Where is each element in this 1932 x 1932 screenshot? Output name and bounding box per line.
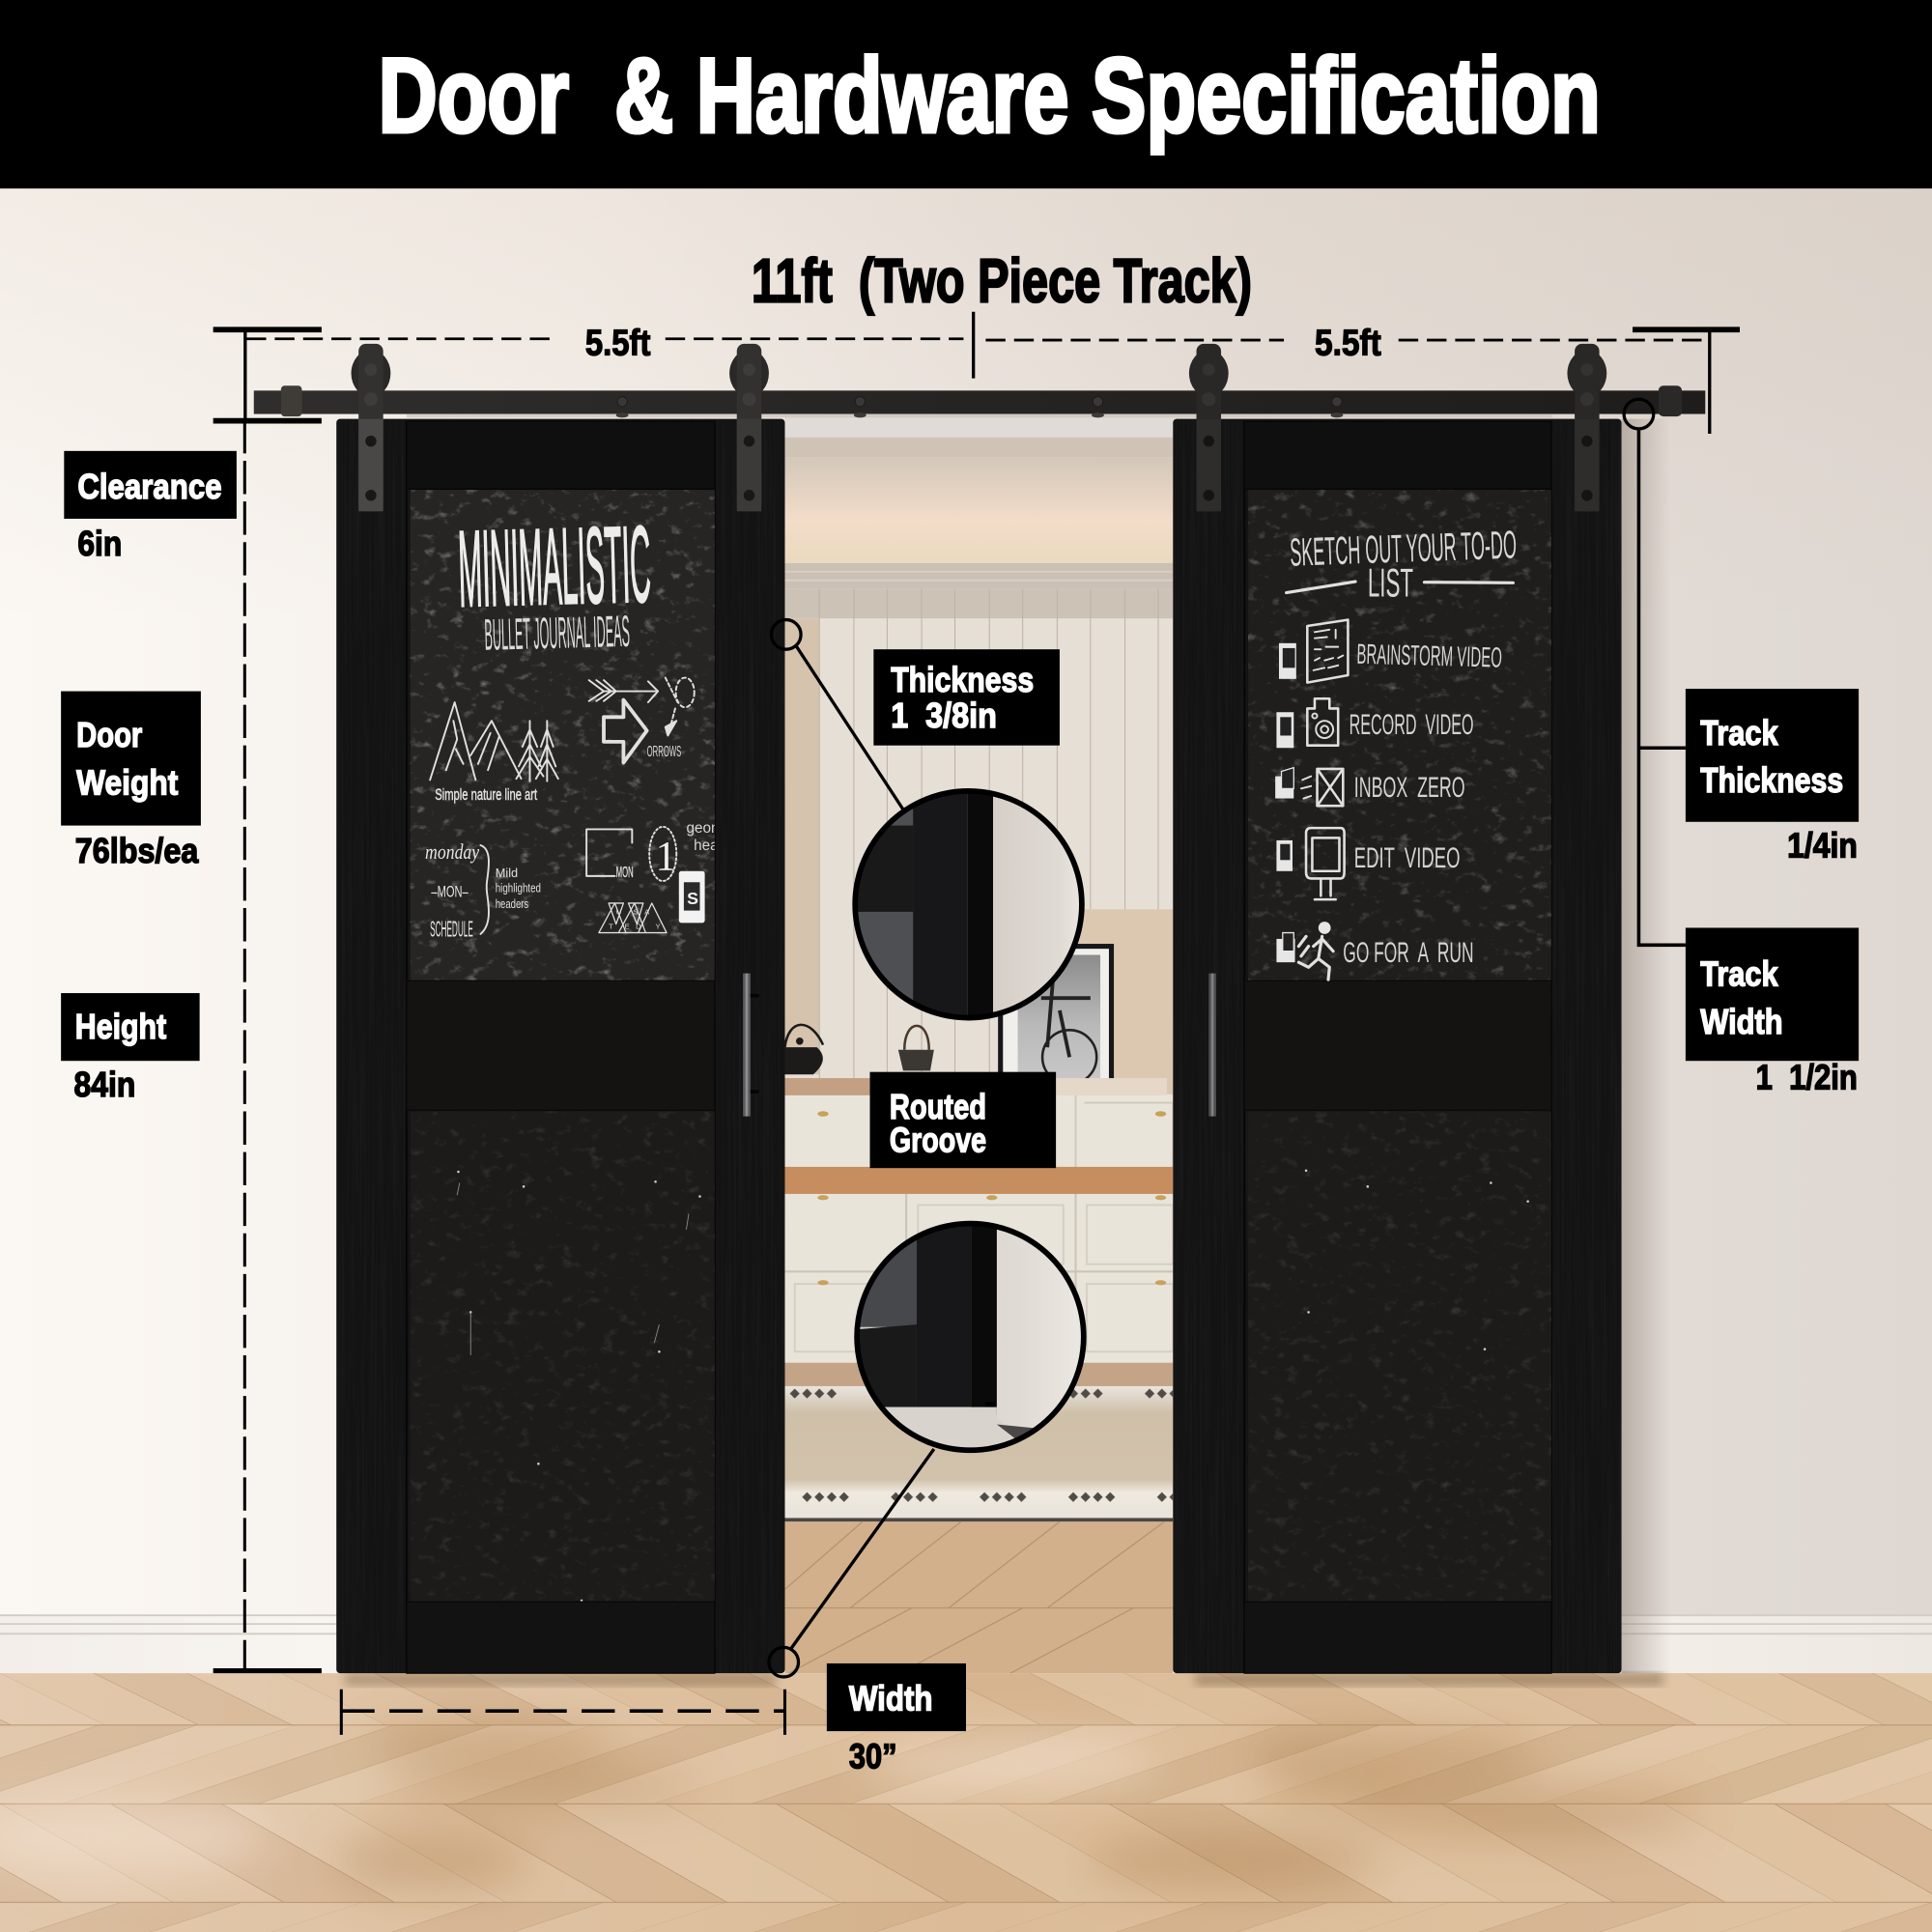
thickness callout leader: [771, 620, 903, 810]
label: track width: [1686, 927, 1859, 1097]
label: width: [827, 1663, 966, 1776]
right door lower panel: [1248, 1112, 1551, 1602]
wall background: [0, 188, 1932, 1680]
groove callout leader: [769, 1449, 934, 1677]
label: track width: Track: [1700, 954, 1778, 993]
track bolts: [617, 397, 1342, 407]
detail circle: routed groove: [855, 1222, 1087, 1454]
chalk art: minimalistic bullet journal: BULLET JOURNAL IDEAS: [484, 606, 631, 660]
label: routed groove: [870, 1072, 1056, 1168]
label: height: [61, 993, 200, 1104]
row brainstorm video: BRAINSTORM VIDEO: [1356, 639, 1502, 674]
right track stop: [1659, 385, 1682, 416]
label: width: Width: [849, 1679, 933, 1718]
arrows doodle: [589, 678, 695, 763]
chalk note: headers: [496, 896, 528, 911]
chalk art: minimalistic bullet journal: [425, 525, 715, 937]
row inbox zero: INBOX ZERO: [1354, 772, 1465, 804]
header bar: [0, 0, 1932, 188]
backsplash: [1078, 909, 1173, 1094]
chalk tuesday banner: S: [634, 907, 639, 916]
patterned rug: [784, 1385, 1173, 1521]
label: height: 84in: [74, 1065, 135, 1104]
right door handle: [1208, 974, 1216, 1117]
chalk monday: monday: [425, 840, 479, 864]
chalk tuesday banner: T: [609, 923, 613, 931]
chalk tuesday banner: U: [616, 907, 621, 916]
label: door weight: [61, 692, 201, 870]
row inbox zero: [1275, 768, 1465, 806]
chalk s badge: S: [687, 889, 698, 908]
chalk s badge: [679, 871, 705, 923]
chalk caption: Simple nature line art: [435, 785, 537, 804]
label: clearance: 6in: [77, 525, 122, 563]
chalk underlines: [1287, 582, 1513, 593]
row record video: RECORD VIDEO: [1350, 709, 1474, 741]
chalk art: minimalistic bullet journal: SCHEDULE: [430, 916, 473, 941]
hanger straps: [358, 344, 1600, 511]
label: track width: 1 1/2in: [1756, 1059, 1858, 1097]
detail circle: door thickness: [850, 788, 1087, 1023]
text: SKETCH OUT YOUR TO-DO: [1290, 523, 1518, 575]
left door: [336, 419, 784, 1673]
chalk tuesday banner: [599, 903, 667, 933]
label: door weight: Door: [76, 716, 142, 754]
right door chalk panel: [1248, 489, 1551, 980]
label: track thickness: [1686, 689, 1859, 866]
wainscot panelling: [784, 589, 1173, 1094]
row go for a run: [1276, 922, 1474, 980]
mountains doodle: [430, 702, 558, 781]
right door mid rail: [1244, 980, 1551, 1110]
chalk heading list: LIST: [1368, 559, 1413, 605]
label: routed groove: Groove: [890, 1122, 986, 1160]
label: track width: Width: [1700, 1003, 1783, 1041]
text: MINIMALISTIC: [457, 502, 652, 630]
hanger wheels: [352, 350, 1606, 397]
chalk tuesday banner: A: [644, 907, 650, 916]
chalk art: to-do list: [1275, 523, 1518, 980]
chalk mon box: MON: [616, 865, 634, 881]
track dimension lines: [213, 312, 1740, 434]
label: height: Height: [75, 1008, 166, 1046]
label: track thickness: Track: [1700, 714, 1778, 753]
framed bicycle photo: [998, 944, 1114, 1094]
sliding track: [254, 385, 1705, 417]
wood chevron floor: [0, 1673, 1932, 1932]
label: thickness: 1 3/8in: [891, 696, 997, 735]
label: routed groove: Routed: [890, 1088, 986, 1126]
chalk tuesday banner: Y: [656, 923, 661, 931]
chalk note: [496, 866, 541, 911]
row record video: [1276, 698, 1474, 748]
label: thickness: Thickness: [891, 661, 1034, 699]
left door mid rail: [407, 980, 715, 1110]
left kettle: [784, 1025, 823, 1074]
label: track thickness: Thickness: [1700, 761, 1843, 800]
left door bottom rail: [407, 1602, 715, 1673]
chalk number one: 1: [656, 834, 676, 880]
right door top rail: [1244, 421, 1551, 489]
chalk note: Mild: [496, 866, 518, 880]
chalk tuesday banner: D: [636, 923, 641, 931]
label: thickness: [873, 649, 1060, 746]
chalk label orrows: ORROWS: [647, 744, 681, 760]
chalk geometric heading: geometric: [686, 820, 752, 837]
left door chalk panel: [411, 489, 715, 980]
label: door weight: Weight: [76, 764, 178, 803]
row edit video: EDIT VIDEO: [1354, 842, 1460, 874]
label: clearance: Clearance: [77, 468, 222, 506]
chalk mon: –MON–: [431, 883, 469, 901]
chalk mon box: [586, 829, 634, 881]
chalk note: highlighted: [496, 880, 541, 895]
counter and upper drawers: [784, 1078, 1173, 1167]
label: door weight: 76lbs/ea: [75, 832, 199, 870]
wood worktop: [784, 1167, 1173, 1194]
left door lower panel: [411, 1112, 715, 1602]
row go for a run: GO FOR A RUN: [1343, 937, 1474, 969]
right door bottom rail: [1244, 1602, 1551, 1673]
title: Door & Hardware Specification: [379, 37, 1601, 155]
label: track thickness: 1/4in: [1787, 827, 1858, 866]
left door handle: [743, 974, 759, 1117]
left door top rail: [407, 421, 715, 489]
left track section length: 5.5ft: [585, 322, 651, 363]
doorway floor: [784, 1521, 1173, 1673]
row edit video: [1276, 828, 1460, 899]
chalk geometric heading: [686, 820, 752, 854]
doorway: kitchen scene: [784, 414, 1173, 1673]
track length heading: 11ft (Two Piece Track): [752, 245, 1252, 315]
height dimension line: [213, 420, 322, 1671]
track callout connector: [1624, 399, 1686, 945]
chalk geometric heading: headers: [694, 838, 748, 854]
width dimension line: [341, 1690, 784, 1735]
right door: [1173, 419, 1622, 1673]
chalk tuesday banner: E: [625, 923, 630, 931]
left track stop: [281, 385, 301, 416]
label: clearance: [64, 451, 237, 563]
row brainstorm video: [1279, 620, 1502, 683]
label: width: 30”: [849, 1737, 897, 1776]
right track section length: 5.5ft: [1315, 322, 1381, 363]
chalk brace: [480, 845, 489, 934]
chalk number one: [649, 827, 676, 881]
center kettle: [898, 1026, 934, 1070]
lower cabinets: [784, 1194, 1173, 1363]
door shadow on wall: [345, 419, 1671, 1686]
